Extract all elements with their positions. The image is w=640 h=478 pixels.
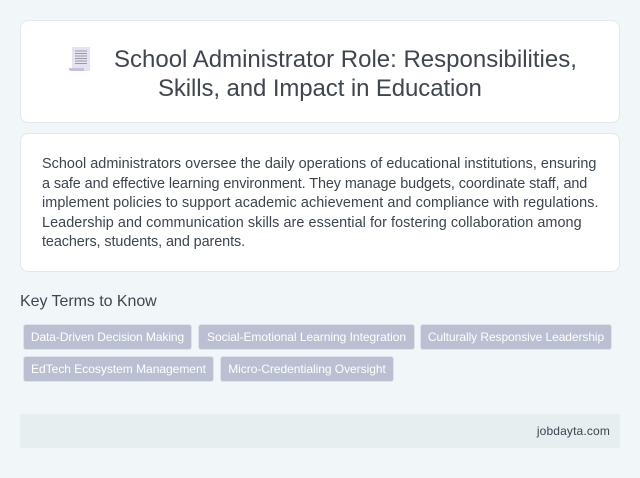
text block: description: Leadership and communication skills are essential for fostering collaboration among xyxy=(42,215,582,231)
tag: EdTech Ecosystem Management xyxy=(23,356,214,382)
tag: Culturally Responsive Leadership: Culturally Responsive Leadership xyxy=(428,330,604,344)
tag: Data-Driven Decision Making xyxy=(23,324,192,350)
heading: key terms: Key Terms to Know xyxy=(20,293,157,310)
footer text: jobdayta.com xyxy=(537,424,610,438)
tag: Social-Emotional Learning Integration xyxy=(198,324,415,350)
title: Skills, and Impact in Education xyxy=(158,75,482,102)
panel: description xyxy=(20,133,620,272)
tag: Data-Driven Decision Making: Data-Driven Decision Making xyxy=(31,330,184,344)
title xyxy=(114,46,577,102)
title: School Administrator Role: Responsibilities, xyxy=(114,46,577,73)
panel: title card xyxy=(20,20,620,123)
text block: description: a safe and effective learning environment. They manage budgets, coordinate staff, and xyxy=(42,176,587,192)
text block: description: teachers, students, and parents. xyxy=(42,234,245,250)
tag: Micro-Credentialing Oversight xyxy=(220,356,394,382)
tag: Micro-Credentialing Oversight: Micro-Credentialing Oversight xyxy=(228,362,386,376)
tag: EdTech Ecosystem Management: EdTech Ecosystem Management xyxy=(31,362,206,376)
tag: Social-Emotional Learning Integration: Social-Emotional Learning Integration xyxy=(207,330,406,344)
footer bar xyxy=(20,414,620,448)
icon: document scroll xyxy=(69,47,90,71)
text block: description: implement policies to support academic achievement and compliance with regulations. xyxy=(42,195,599,211)
text block: description xyxy=(42,156,599,250)
text block: description: School administrators oversee the daily operations of educational institutions, ensuring xyxy=(42,156,596,172)
tag: Culturally Responsive Leadership xyxy=(420,324,612,350)
